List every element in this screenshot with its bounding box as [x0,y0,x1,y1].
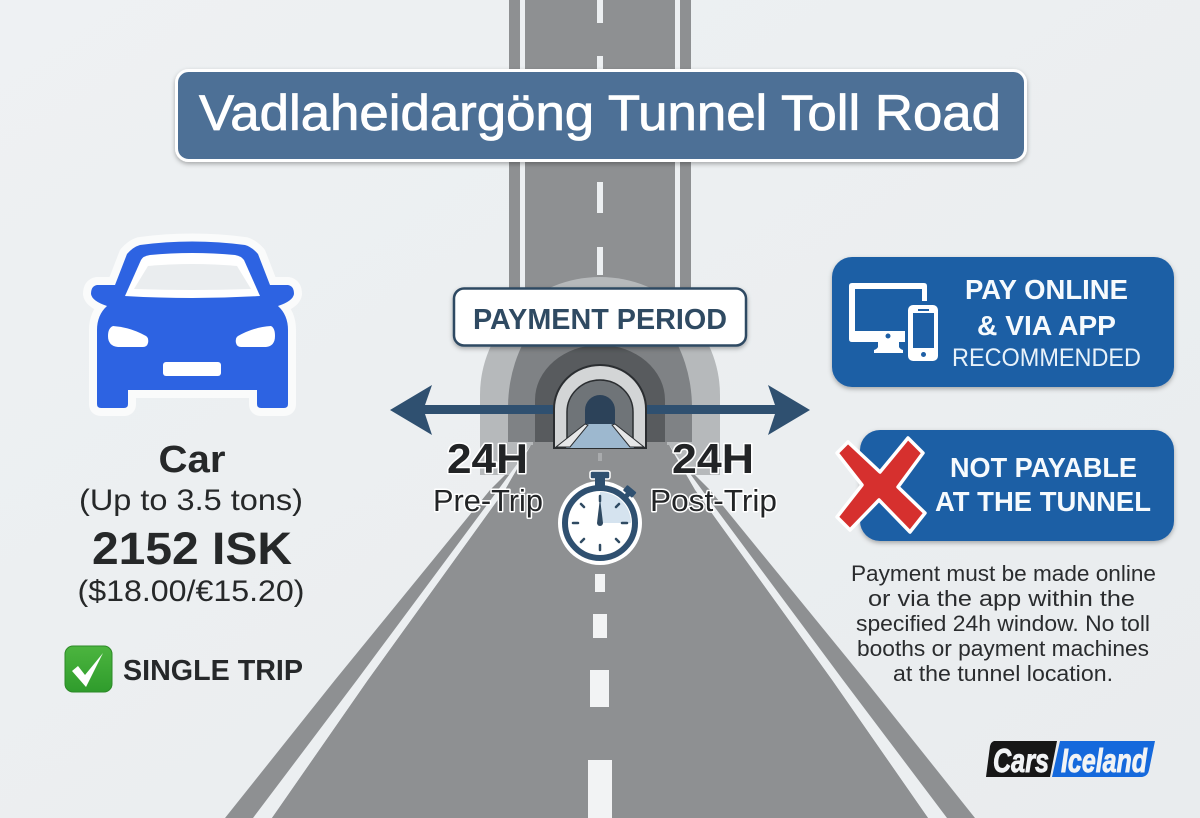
payment note [851,561,1156,686]
panel: pay online [832,257,1174,387]
title [176,70,1026,160]
payment note: or via the app within the [868,586,1135,611]
icon: tunnel [554,365,646,448]
warning text: NOT PAYABLE [950,452,1137,483]
payment note: booths or payment machines [857,636,1149,661]
payment headline: PAY ONLINE [965,274,1128,305]
panel: not payable [837,430,1174,541]
logo: Cars Iceland: Iceland [1061,742,1148,779]
payment note: at the tunnel location. [893,661,1113,686]
icon: monitor and phone [849,283,938,361]
payment note: specified 24h window. No toll [856,611,1150,636]
upper road [509,0,691,300]
panel: pay online: & VIA APP [977,310,1116,341]
weight limit: (Up to 3.5 tons) [79,484,303,517]
logo: Cars Iceland: Cars [993,742,1049,779]
single trip badge [65,646,303,692]
arrows [390,385,810,435]
post-trip label: 24H [672,435,754,482]
payment note: Payment must be made online [851,561,1156,586]
panel: not payable: AT THE TUNNEL [935,486,1151,517]
price: 2152 ISK [92,523,293,574]
icon: stopwatch [558,471,642,565]
pre-trip label: Pre-Trip [433,483,543,518]
pre-trip label [433,435,543,518]
vehicle details [78,439,304,608]
logo: Cars Iceland [986,741,1155,779]
post-trip label [650,435,777,518]
price conversion: ($18.00/€15.20) [78,575,304,608]
icon: car [91,242,294,408]
pre-trip label: 24H [447,435,528,482]
lower road [225,442,975,818]
payment period label [454,288,746,346]
title: Vadlaheidargöng Tunnel Toll Road [199,85,1001,141]
post-trip label: Post-Trip [650,483,777,518]
payment period label: PAYMENT PERIOD [473,304,727,336]
single trip badge: SINGLE TRIP [123,655,303,687]
vehicle name: Car [158,439,226,481]
recommended tag: RECOMMENDED [952,344,1141,372]
icon: red cross [837,438,925,532]
tunnel arches [480,277,720,475]
